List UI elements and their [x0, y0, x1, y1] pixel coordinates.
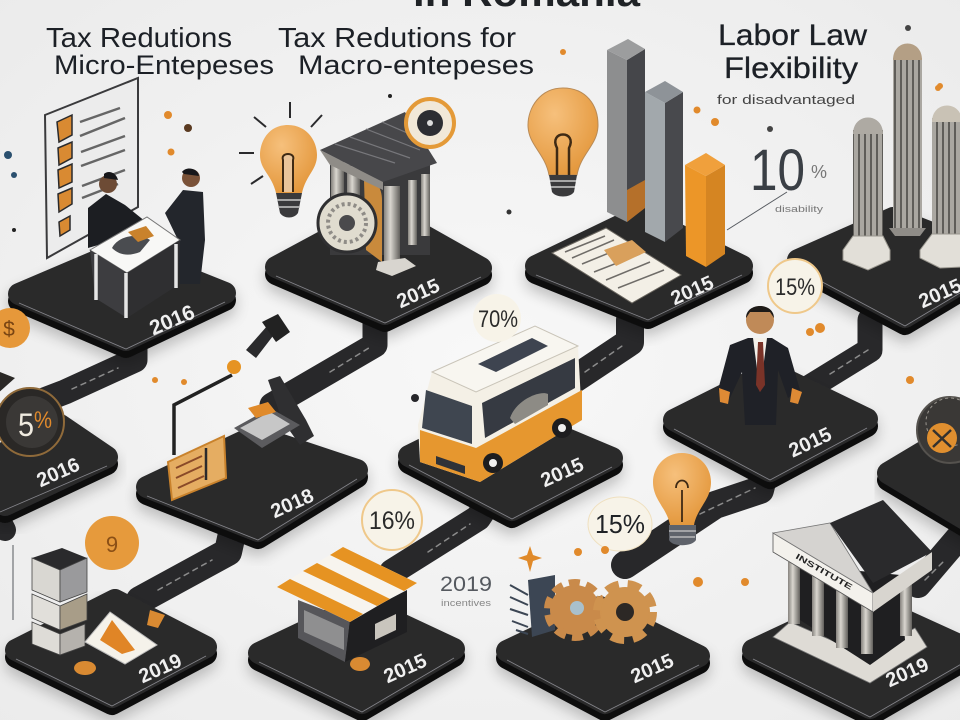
- platform: 2019 bottom right: [753, 600, 960, 717]
- platform: right edge with wheel: [888, 430, 960, 532]
- decorative accents: orange particles: [4, 25, 943, 587]
- icon: 5 percent dial: [0, 372, 64, 456]
- icon: stack of books and coin: [13, 516, 165, 675]
- badge: 15 percent, gears: 15%: [595, 509, 645, 539]
- icon: bank building with dial: [318, 99, 454, 276]
- platform: 2019 bottom right: 2019: [883, 654, 932, 692]
- label: 2019: incentives: [441, 598, 492, 608]
- badge: 70 percent, bus: 70%: [478, 306, 518, 333]
- icon: classical bank building: [773, 500, 932, 683]
- label: 2019: 2019: [440, 573, 492, 596]
- icon: gears with pillar: [510, 546, 650, 637]
- icon: 5 percent dial: 5: [18, 407, 34, 443]
- platform: 2015 top right centre: 2015: [668, 272, 717, 310]
- icon: large light bulb: [528, 88, 598, 196]
- stat: 10 percent: %: [811, 162, 827, 182]
- platform: 2015 with businessman: 2015: [786, 424, 835, 462]
- heading: labor law flexibility: Flexibility: [724, 52, 858, 85]
- stat: 10 percent: [727, 138, 827, 230]
- icon: businessman: [718, 306, 802, 425]
- badge: 15 percent, right: [768, 259, 822, 313]
- icon: orange coin left edge: [0, 308, 30, 348]
- icon: striped market stall: [277, 547, 417, 671]
- badge: 16 percent: 16%: [369, 507, 415, 535]
- heading: tax reductions for, right: Tax Redutions for: [278, 22, 516, 53]
- label: 2019: [440, 573, 492, 608]
- platform: 2016 with dial, left: [0, 425, 107, 512]
- icon: checklist board and two officials at a desk: [45, 78, 205, 318]
- connector paths between platforms: [0, 320, 960, 600]
- icon: bus: [411, 326, 582, 482]
- platform: 2015 with bus: [409, 411, 612, 519]
- heading: labor law flexibility: for disadvantaged: [717, 92, 855, 107]
- icon: classical bank building: INSTITUTE: [794, 552, 855, 592]
- platform: 2015 with shop: 2015: [381, 650, 430, 688]
- badge: 15 percent, gears: [588, 497, 652, 551]
- platform: 2015 with shop: [259, 605, 454, 712]
- heading: tax reductions, left: Tax Redutions: [46, 22, 232, 53]
- platform: 2015 with bus: 2015: [538, 454, 587, 492]
- icon: light bulb bottom centre: [653, 453, 711, 545]
- platform: 2016 with dial, left: 2016: [34, 454, 83, 492]
- platform: 2018 with gavel and book: 2018: [268, 485, 317, 523]
- icon: wheel dial right edge: [917, 397, 960, 463]
- platform: 2015 far right: [798, 218, 960, 326]
- platform: 2015 top centre: [276, 211, 481, 323]
- platform: 2016 top left: [19, 251, 225, 349]
- heading: micro-enterprises: Micro-Entepeses: [54, 50, 274, 80]
- heading: labor law flexibility: Labor Law: [718, 19, 867, 52]
- platform: 2015 top right centre: [536, 216, 742, 320]
- badge: 16 percent: [362, 490, 422, 550]
- platform: 2015 with businessman: [674, 372, 867, 480]
- badge: 70 percent, bus: [473, 294, 521, 342]
- platform: 2016 top left: 2016: [146, 301, 198, 340]
- heading: macro-enterprises: Macro-entepeses: [298, 50, 534, 80]
- platform: 2015 with gears: [507, 607, 699, 712]
- icon: light bulb with rays: [239, 102, 322, 218]
- icon: gavel lamp and open book: [168, 314, 314, 500]
- platform: 2015 top centre: 2015: [394, 275, 443, 313]
- platform: 2019 bottom left: 2019: [136, 650, 185, 688]
- icon: document with chart: [552, 228, 681, 303]
- bar chart: three rising bars: [607, 39, 725, 267]
- stat: 10 percent: disability: [775, 204, 824, 214]
- platform: 2018 with gavel and book: [147, 436, 357, 540]
- icon: 5 percent dial: %: [34, 407, 52, 434]
- icon: three stone columns: [843, 44, 960, 270]
- badge: 15 percent, right: 15%: [775, 274, 815, 301]
- platform: 2015 with gears: 2015: [628, 650, 677, 688]
- icon: stack of books and coin: 9: [106, 532, 118, 557]
- stat: 10 percent: 10: [750, 138, 805, 203]
- heading: labor law flexibility: [717, 19, 867, 107]
- platform: 2019 bottom left: [16, 600, 206, 706]
- icon: orange coin left edge: $: [3, 318, 15, 341]
